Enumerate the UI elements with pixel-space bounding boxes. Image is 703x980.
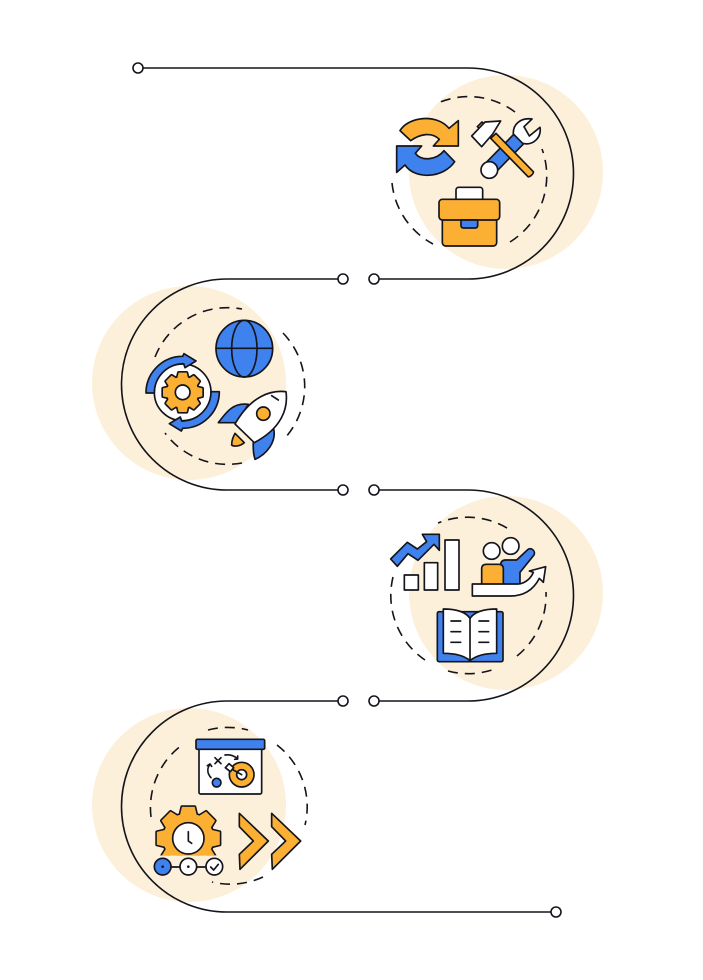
- panel: step 1 tools: [133, 63, 603, 284]
- dashed ring 3: [391, 517, 546, 674]
- end node: [551, 907, 561, 917]
- connector line 2: [122, 279, 338, 490]
- panel: step 4 strategy: [92, 696, 561, 917]
- node 3 start: [338, 696, 348, 706]
- icon: gear with cycle arrows: [146, 354, 219, 431]
- icon: globe: [216, 320, 273, 377]
- background blob 1: [409, 75, 603, 269]
- node 1 start: [338, 274, 348, 284]
- start node: [133, 63, 143, 73]
- dashed ring 4: [150, 727, 307, 884]
- background blob 3: [409, 496, 603, 690]
- icon: open book: [437, 609, 503, 662]
- node 2 start: [369, 485, 379, 495]
- icon: refresh arrows: [397, 119, 458, 175]
- icon: rising bar chart: [391, 534, 459, 590]
- node 1 end: [369, 274, 379, 284]
- node 3 end: [369, 696, 379, 706]
- dashed ring 2: [155, 308, 305, 464]
- connector line 3: [379, 490, 574, 701]
- icon: toolbox: [439, 187, 500, 246]
- node 2 end: [338, 485, 348, 495]
- icon: rocket: [218, 391, 286, 459]
- panel: step 2 launch: [92, 274, 348, 495]
- icon: double chevrons: [239, 813, 301, 869]
- connector line 1: [143, 68, 574, 279]
- background blob 2: [92, 286, 286, 480]
- dashed ring 1: [392, 97, 547, 244]
- icon: gear with clock and timeline: [154, 807, 223, 875]
- roadmap infographic: [92, 62, 603, 918]
- icon: people with arrow: [472, 538, 546, 596]
- background blob 4: [92, 708, 286, 902]
- icon: strategy board: [196, 739, 265, 794]
- connector line 4: [122, 701, 551, 912]
- panel: step 3 growth: [369, 485, 603, 706]
- icon: hammer and wrench: [472, 119, 540, 178]
